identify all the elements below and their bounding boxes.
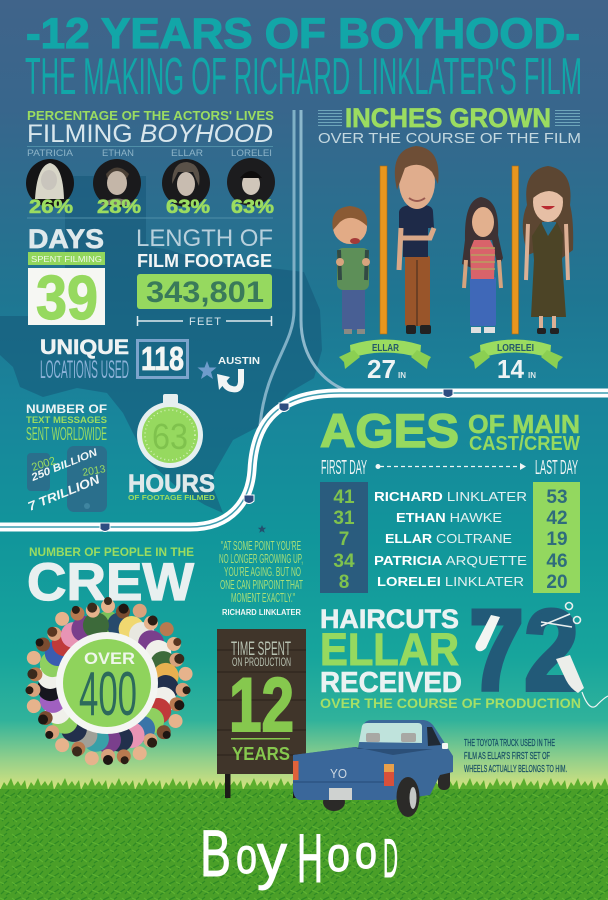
stopwatch: hours of footage: HOURS xyxy=(128,470,215,498)
percentages: 63% xyxy=(231,197,274,218)
quote: NO LONGER GROWING UP, xyxy=(219,552,303,566)
panel: percentage of actors' lives: FILMING BOYHOOD xyxy=(27,120,273,148)
ribbon: Lorelei: 14 xyxy=(497,354,525,384)
figure: older Lorelei xyxy=(523,166,573,334)
quote: ONE CAN PINPOINT THAT xyxy=(220,578,303,592)
text: SENT WORLDWIDE xyxy=(26,424,107,444)
panel: ages of main cast and crew: 42 xyxy=(546,508,568,529)
panel: ages of main cast and crew xyxy=(320,404,580,593)
ribbon: Ellar: 27 xyxy=(367,354,396,384)
quote xyxy=(219,525,303,617)
map of Texas xyxy=(0,176,322,513)
over 400 badge: OVER xyxy=(84,649,135,668)
panel: ages of main cast and crew: OF MAIN xyxy=(468,409,580,439)
crowd ring xyxy=(23,597,194,768)
panel: days spent filming: 39 xyxy=(36,264,98,333)
panel: haircuts: OVER THE COURSE OF PRODUCTION xyxy=(320,695,581,711)
text messages: 2002 xyxy=(30,455,57,474)
quote: "AT SOME POINT YOU'RE xyxy=(221,539,301,553)
names: PATRICIA ARQUETTE xyxy=(374,553,527,568)
ribbon: Lorelei: LORELEI xyxy=(497,343,534,354)
panel: length of film footage: FEET xyxy=(189,316,221,328)
percentages xyxy=(29,197,274,218)
names: LORELEI LINKLATER xyxy=(377,574,524,589)
Boyhood logo: o xyxy=(327,829,350,882)
text messages xyxy=(26,404,107,514)
percentages: 26% xyxy=(29,197,73,218)
panel: ages of main cast and crew: 31 xyxy=(333,508,355,529)
panel: haircuts: RECEIVED xyxy=(320,667,462,699)
stopwatch: hours of footage xyxy=(128,394,216,502)
Austin marker: AUSTIN xyxy=(218,355,260,367)
actor names xyxy=(27,148,272,158)
panel: haircuts: 72 xyxy=(469,587,579,715)
truck: YO xyxy=(330,766,347,781)
title: -12 YEARS OF BOYHOOD- xyxy=(26,10,580,58)
Austin marker xyxy=(198,355,260,390)
icon: comb xyxy=(475,615,500,651)
panel: unique locations xyxy=(40,336,188,384)
truck caption xyxy=(464,737,567,775)
Boyhood logo: o xyxy=(355,826,377,878)
figure: young Ellar xyxy=(332,206,370,334)
stopwatch: hours of footage: OF FOOTAGE FILMED xyxy=(128,493,216,502)
names: ETHAN HAWKE xyxy=(396,510,502,525)
panel: haircuts xyxy=(320,587,608,715)
panel: days spent filming xyxy=(28,224,105,333)
text messages: 2013 xyxy=(81,463,107,479)
panel: number of people in the crew xyxy=(23,545,194,768)
names: RICHARD LINKLATER xyxy=(374,489,527,504)
phones xyxy=(27,453,50,491)
Boyhood logo: H xyxy=(297,820,323,897)
over 400 badge: 400 xyxy=(79,660,137,729)
actor names: ETHAN xyxy=(102,148,134,158)
panel: haircuts: HAIRCUTS xyxy=(320,604,459,634)
wooden sign: time spent on production: 12 xyxy=(229,663,294,748)
quote: YOU'RE AGING. BUT NO xyxy=(224,565,301,579)
panel: ages of main cast and crew: 7 xyxy=(339,529,349,550)
actor names: LORELEI xyxy=(231,148,272,158)
actor names: ELLAR xyxy=(171,148,204,158)
panel: inches grown: OVER THE COURSE OF THE FILM xyxy=(318,130,581,147)
portrait: Ellar xyxy=(162,159,210,207)
last-day column xyxy=(533,482,580,593)
portrait: Patricia xyxy=(26,159,74,207)
icon: clippers xyxy=(556,655,608,707)
panel: ages of main cast and crew: 34 xyxy=(333,551,355,572)
highway shields xyxy=(100,389,453,532)
panel: ages of main cast and crew: 46 xyxy=(546,551,568,572)
stopwatch: hours of footage: 63 xyxy=(152,416,188,457)
panel: ages of main cast and crew: 53 xyxy=(546,487,568,508)
ribbon: Ellar xyxy=(339,340,431,384)
ribbon: Lorelei: IN xyxy=(528,371,536,380)
figure: young Lorelei xyxy=(462,197,503,333)
panel: ages of main cast and crew: 8 xyxy=(339,572,349,593)
Boyhood logo: y xyxy=(257,822,287,891)
text messages: 250 BILLION xyxy=(29,446,99,484)
text messages: NUMBER OF xyxy=(26,404,107,416)
text: D xyxy=(383,827,398,889)
icon: scissors xyxy=(541,602,580,627)
Boyhood logo: o xyxy=(236,828,257,884)
figure: older Ellar xyxy=(395,146,439,334)
panel: ages of main cast and crew: FIRST DAY xyxy=(321,457,367,479)
over 400 badge xyxy=(56,632,158,734)
quote: MOMENT EXACTLY." xyxy=(231,591,295,605)
panel: unique locations: UNIQUE xyxy=(40,336,129,359)
wooden sign: time spent on production: ON PRODUCTION xyxy=(232,657,291,669)
heading: AGES xyxy=(320,404,459,457)
wooden sign: time spent on production: TIME SPENT xyxy=(231,639,291,660)
grass xyxy=(0,776,608,900)
ribbon: Ellar: IN xyxy=(398,371,406,380)
panel: ages of main cast and crew: CAST/CREW xyxy=(469,433,580,455)
text messages: 7 TRILLION xyxy=(26,472,103,514)
panel: percentage of actors' lives xyxy=(26,108,275,218)
Boyhood logo xyxy=(200,816,398,897)
quote: RICHARD LINKLATER xyxy=(222,608,301,617)
panel: ages of main cast and crew: 41 xyxy=(333,487,355,508)
heading: PERCENTAGE OF THE ACTORS' LIVES xyxy=(27,108,274,123)
rulers xyxy=(380,166,387,334)
panel: days spent filming: SPENT FILMING xyxy=(31,254,102,264)
Boyhood logo: B xyxy=(200,816,231,890)
panel: length of film footage: 343,801 xyxy=(146,276,264,309)
text messages: TEXT MESSAGES xyxy=(26,415,107,425)
panel: number of people in the crew: NUMBER OF PEOPLE IN THE xyxy=(29,545,194,559)
truck xyxy=(293,720,453,817)
panel: length of film footage: FILM FOOTAGE xyxy=(137,251,272,271)
panel: days spent filming: DAYS xyxy=(28,224,104,254)
panel: unique locations: 118 xyxy=(141,340,184,377)
portrait: Ethan xyxy=(93,159,141,207)
panel: length of film footage: LENGTH OF xyxy=(136,225,273,252)
panel: ages of main cast and crew: 20 xyxy=(546,572,568,593)
names xyxy=(374,489,527,589)
actor names: PATRICIA xyxy=(27,148,73,158)
panel: ages of main cast and crew: 19 xyxy=(546,529,568,550)
panel: haircuts: ELLAR xyxy=(320,624,459,675)
portrait: Lorelei xyxy=(227,158,275,206)
wooden sign: time spent on production: YEARS xyxy=(232,744,290,764)
names: ELLAR COLTRANE xyxy=(385,531,512,546)
panel: length of film footage xyxy=(136,225,273,328)
wooden sign: time spent on production xyxy=(217,629,306,798)
percentages: 28% xyxy=(97,197,141,218)
ribbon: Ellar: ELLAR xyxy=(372,343,400,354)
percentages: 63% xyxy=(166,197,210,218)
panel: unique locations: LOCATIONS USED xyxy=(40,356,129,384)
ribbon: Lorelei xyxy=(469,340,563,384)
panel: inches grown xyxy=(318,103,581,384)
first-day column xyxy=(320,482,368,593)
title xyxy=(25,10,582,106)
panel: number of people in the crew: CREW xyxy=(27,553,194,612)
roads xyxy=(0,110,608,527)
heading: INCHES GROWN xyxy=(345,103,551,133)
